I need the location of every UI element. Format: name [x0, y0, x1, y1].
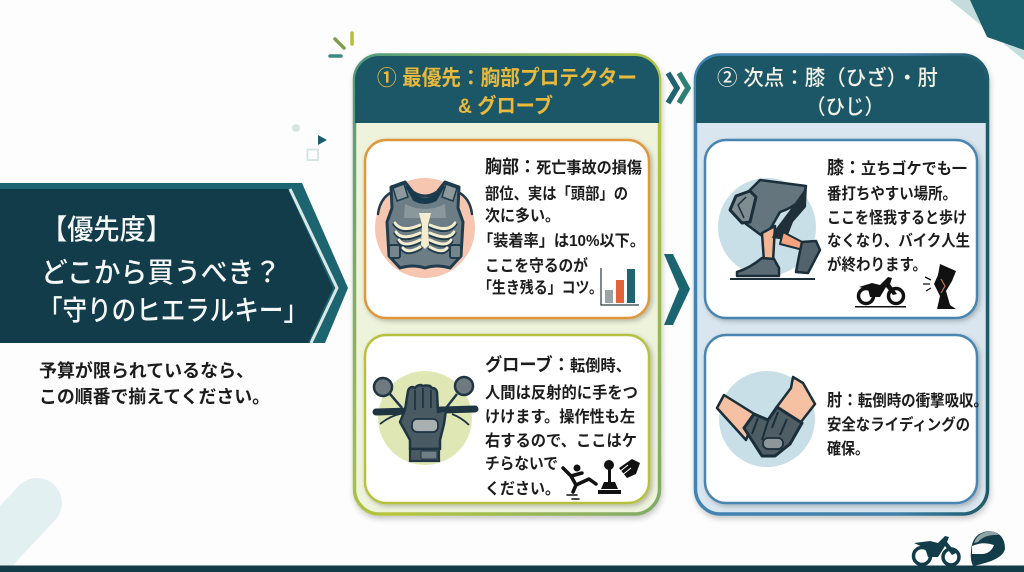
panel header: top priority: & グローブ: [458, 94, 553, 118]
arrow: double chevron: [668, 73, 688, 103]
decoration: small shapes: [292, 124, 327, 160]
gloves text: 右するので、ここはケ: [485, 432, 637, 450]
chest text: 部位、実は「頭部」の: [485, 185, 628, 203]
elbow text: 肘：転倒時の衝撃吸収。: [827, 391, 988, 410]
panel header: top priority: ① 最優先：胸部プロテクター: [377, 67, 637, 90]
knee text: 番打ちやすい場所。: [827, 184, 957, 203]
title banner: [0, 183, 348, 343]
elbow text: 確保。: [827, 439, 869, 458]
panel header: second priority: [696, 56, 986, 123]
icon: motorcycle: [855, 277, 906, 308]
gloves text: [485, 354, 638, 498]
card: chest: [365, 140, 649, 318]
chest text: [478, 157, 645, 297]
banner title text: どこから買うべき？: [41, 257, 281, 288]
knee text: が終わります。: [827, 255, 927, 274]
card: elbow: [705, 335, 988, 503]
bottom bar: [0, 566, 1024, 572]
icon: falling person: [563, 464, 596, 499]
panel header: top priority: [355, 56, 659, 123]
icon: footer motorcycle: [914, 536, 959, 565]
card: knee: [705, 140, 977, 318]
decoration: top right corner shapes: [950, 0, 1024, 60]
lead text: 予算が限られているなら、: [39, 360, 254, 381]
chest text: ここを守るのが: [485, 256, 588, 275]
gloves text: グローブ：転倒時、: [485, 354, 631, 375]
chest text: 次に多い。: [485, 207, 560, 225]
chest text: 「生き残る」コツ。: [478, 278, 603, 297]
elbow text: 安全なライディングの: [827, 415, 970, 434]
gloves text: チらないで: [485, 455, 558, 473]
banner title text: 「守りのヒエラルキー」: [38, 295, 308, 326]
knee text: なくなり、バイク人生: [827, 232, 970, 250]
icon: hurting leg: [923, 264, 956, 309]
icon: chest protector: [375, 178, 475, 278]
decoration: bottom left stripe: [0, 503, 37, 572]
icon: bar chart: [601, 268, 639, 305]
chest text: 「装着率」は10%以下。: [478, 231, 645, 250]
arrow: large chevron: [664, 254, 690, 325]
elbow text: [827, 391, 988, 458]
knee text: ここを怪我すると歩け: [827, 209, 967, 227]
icon: elbow pad: [717, 371, 815, 467]
knee text: 膝：立ちゴケでも一: [827, 158, 967, 178]
lead text: [39, 360, 270, 407]
card: gloves: [365, 335, 649, 503]
panel: top priority: [354, 55, 660, 514]
icon: footer helmet: [971, 531, 1005, 566]
chest text: 胸部：死亡事故の損傷: [485, 157, 642, 177]
icon: knee pad and leg: [718, 178, 820, 279]
icon: glove on handlebar: [374, 371, 475, 465]
gloves text: ください。: [485, 480, 560, 498]
gloves text: けけます。操作性も左: [485, 407, 635, 426]
panel header: second priority: ② 次点：膝（ひざ）・肘: [717, 66, 938, 90]
lead text: この順番で揃えてください。: [39, 387, 270, 407]
knee text: [827, 158, 970, 274]
panel: second priority: [696, 55, 988, 514]
decoration: spark lines: [330, 33, 352, 56]
gloves text: 人間は反射的に手をつ: [485, 383, 638, 402]
banner title text: [38, 214, 308, 326]
icon: joystick and glove: [598, 459, 640, 494]
panel header: second priority: （ひじ）: [806, 96, 884, 119]
banner title text: 【優先度】: [41, 214, 172, 245]
